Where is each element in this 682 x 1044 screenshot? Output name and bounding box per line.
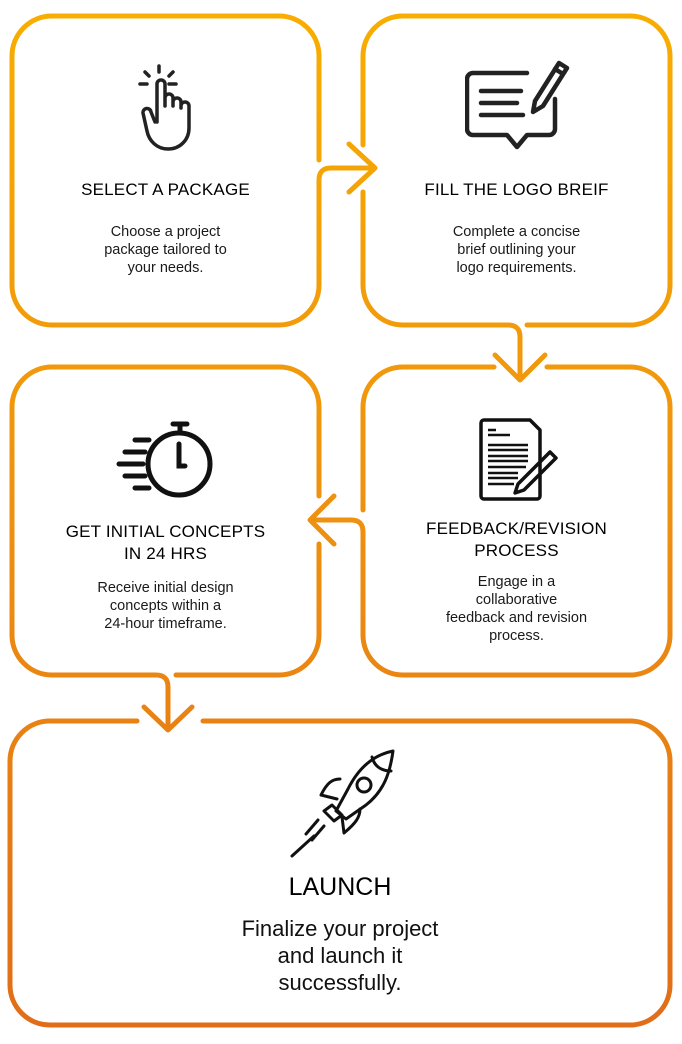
text: launch: and launch it bbox=[278, 943, 402, 968]
heading: feedback: PROCESS bbox=[474, 541, 559, 560]
text: fill the logo brief bbox=[453, 224, 580, 276]
heading: feedback bbox=[426, 519, 607, 560]
heading: launch: LAUNCH bbox=[289, 873, 391, 901]
text: launch bbox=[242, 916, 438, 995]
text: feedback: process. bbox=[489, 628, 544, 644]
text: initial concepts: 24-hour timeframe. bbox=[104, 616, 227, 632]
panel frame: initial concepts bbox=[12, 367, 319, 730]
text: fill the logo brief: Complete a concise bbox=[453, 224, 580, 240]
icon: document with pencil bbox=[479, 418, 558, 501]
text: feedback: Engage in a bbox=[478, 574, 555, 590]
text: initial concepts bbox=[97, 580, 234, 632]
text: initial concepts: concepts within a bbox=[110, 598, 221, 614]
arrow: to initial concepts bbox=[310, 496, 363, 544]
text: select a package bbox=[104, 224, 227, 276]
icon: stopwatch bbox=[116, 422, 212, 498]
heading: feedback: FEEDBACK/REVISION bbox=[426, 519, 607, 538]
text: feedback: collaborative bbox=[476, 592, 557, 608]
text: fill the logo brief: brief outlining your bbox=[457, 242, 576, 258]
text: select a package: package tailored to bbox=[104, 242, 227, 258]
icon: chat with pen bbox=[465, 60, 570, 150]
panel frame: launch bbox=[10, 721, 670, 1025]
text: select a package: Choose a project bbox=[111, 224, 220, 240]
text: initial concepts: Receive initial design bbox=[97, 580, 234, 596]
heading: select a package: SELECT A PACKAGE bbox=[81, 180, 250, 199]
text: fill the logo brief: logo requirements. bbox=[456, 260, 577, 276]
icon: rocket bbox=[290, 750, 394, 858]
heading: fill the logo brief: FILL THE LOGO BREIF bbox=[424, 180, 609, 199]
text: launch: Finalize your project bbox=[242, 916, 438, 941]
heading: initial concepts bbox=[66, 522, 265, 563]
heading: initial concepts: IN 24 HRS bbox=[124, 544, 207, 563]
text: select a package: your needs. bbox=[128, 260, 203, 276]
panel frame: select a package bbox=[12, 16, 319, 325]
panel frame: fill the logo brief bbox=[363, 16, 670, 380]
arrow: to fill brief bbox=[319, 144, 375, 192]
text: feedback: feedback and revision bbox=[446, 610, 587, 626]
text: launch: successfully. bbox=[278, 970, 402, 995]
text: feedback bbox=[446, 574, 587, 644]
icon: pointing hand bbox=[138, 64, 191, 151]
heading: initial concepts: GET INITIAL CONCEPTS bbox=[66, 522, 265, 541]
panel frame: feedback bbox=[363, 367, 670, 675]
